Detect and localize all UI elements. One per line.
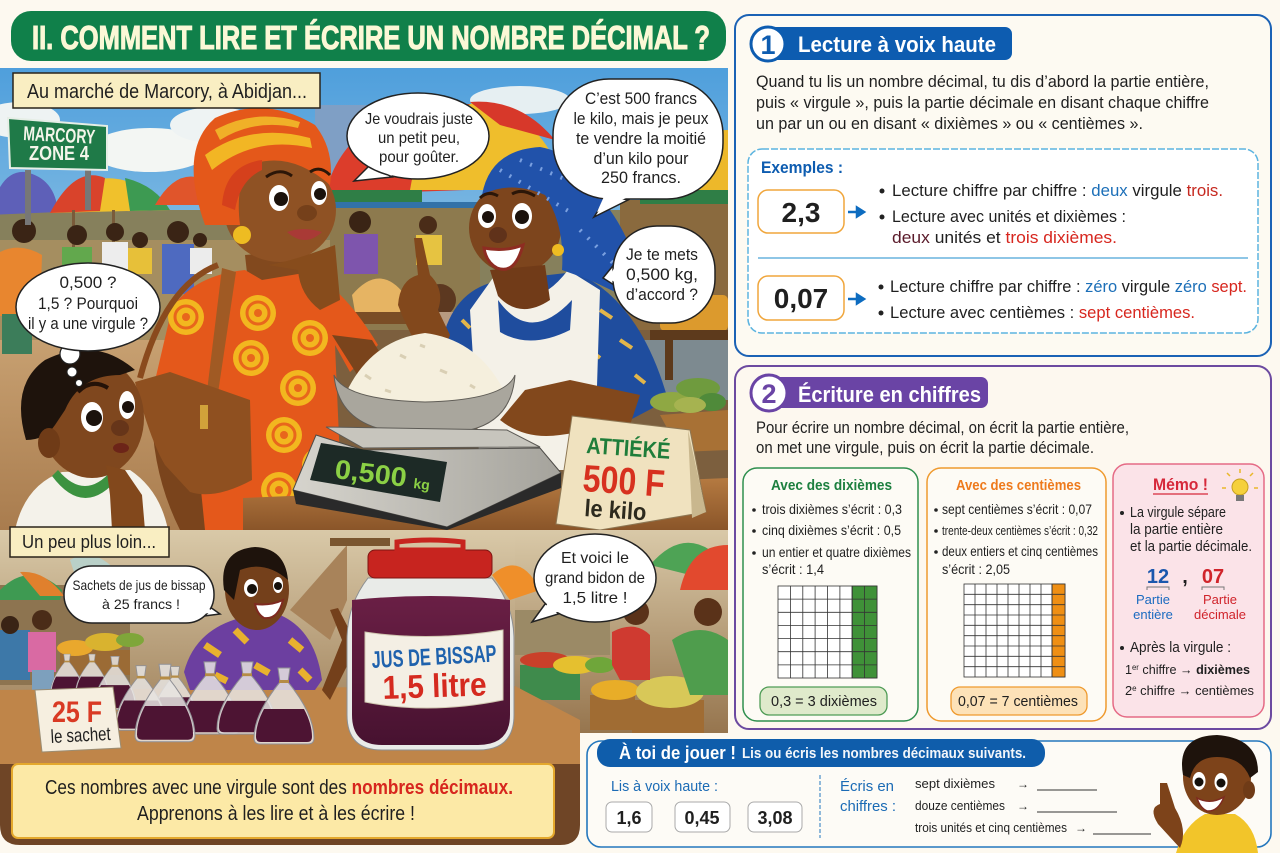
reading exercises: Lis à voix haute : xyxy=(611,778,718,795)
result: 0,3 xyxy=(760,687,887,715)
boy character xyxy=(15,350,168,530)
reading exercises xyxy=(606,778,802,832)
price sign: attiéké xyxy=(556,416,706,530)
price sign: 25 F xyxy=(35,687,121,752)
example 0,07 xyxy=(758,276,1247,322)
writing exercises: sept dixièmes xyxy=(915,776,995,791)
decimal parts example: 07 xyxy=(1202,566,1224,588)
speech bubble: 500 francs: 250 francs. xyxy=(601,169,681,187)
caption: un peu plus loin xyxy=(10,527,169,557)
attiéké bowl xyxy=(334,333,515,430)
banner: Lis ou écris les nombres décimaux suivants. xyxy=(742,745,1026,762)
price sign: 25 F: 25 F xyxy=(52,696,102,729)
card: mémo: e xyxy=(1132,684,1137,693)
card: avec des dixièmes: un entier et quatre dixièmes xyxy=(762,544,911,560)
price sign: attiéké: 500 F xyxy=(581,458,666,506)
title banner: II. COMMENT LIRE ET ÉCRIRE UN NOMBRE DÉCIMAL ? xyxy=(32,19,710,56)
market background stalls xyxy=(0,538,728,733)
banner: À toi de jouer ! xyxy=(619,742,736,763)
speech bubble: grand bidon: grand bidon de xyxy=(545,570,645,587)
introduction text: Pour écrire un nombre décimal, on écrit la partie entière, xyxy=(756,419,1129,437)
card: mémo: dixièmes xyxy=(1196,662,1250,677)
comic scene: bissap juice stall xyxy=(0,527,728,845)
decimal parts example xyxy=(1133,566,1246,622)
icon: light bulb xyxy=(1222,469,1258,501)
conclusion box: Ces nombres avec une virgule sont des nombres décimaux. xyxy=(45,777,513,799)
card: avec des centièmes: s’écrit : 2,05 xyxy=(942,561,1010,577)
introduction text: on met une virgule, puis on écrit la partie décimale. xyxy=(756,439,1094,457)
introduction text: Quand tu lis un nombre décimal, tu dis d’abord la partie entière, xyxy=(756,72,1209,91)
weighing scale: 0,500 xyxy=(333,454,408,493)
speech bubble: 500 francs: C’est 500 francs xyxy=(585,90,697,108)
speech bubble: sachets: à 25 francs ! xyxy=(102,596,180,612)
speech bubble: je voudrais juste: Je voudrais juste xyxy=(365,111,473,128)
card: avec des dixièmes xyxy=(743,468,918,721)
writing exercises: Écris en xyxy=(840,778,894,795)
card: mémo: Mémo ! xyxy=(1153,475,1208,494)
thought bubble: pourquoi une virgule xyxy=(16,263,160,386)
bissap jar: JUS DE BISSAP xyxy=(371,640,497,674)
introduction text: puis « virgule », puis la partie décimale en disant chaque chiffre xyxy=(756,93,1209,112)
writing exercises: chiffres : xyxy=(840,798,896,815)
juice bags xyxy=(50,654,314,744)
decimal parts example: , xyxy=(1182,566,1188,588)
speech bubble: 500 francs xyxy=(553,79,723,217)
clouds and buildings backdrop xyxy=(0,70,570,175)
thought bubble: pourquoi une virgule: il y a une virgule ? xyxy=(28,315,148,333)
example 2,3: Lecture avec unités et dixièmes : xyxy=(892,207,1126,226)
vendor man xyxy=(184,547,352,700)
thought bubble: pourquoi une virgule: 1,5 ? Pourquoi xyxy=(38,295,138,313)
card: mémo: 1 xyxy=(1125,662,1132,677)
heading xyxy=(751,375,988,411)
card: avec des centièmes: sept centièmes s’écrit : 0,07 xyxy=(942,501,1092,517)
card: mémo: er xyxy=(1132,663,1139,672)
title banner xyxy=(11,11,726,61)
crowd figures xyxy=(0,211,458,354)
result: 0,07 xyxy=(951,687,1087,715)
panel 1: lecture à voix haute xyxy=(735,15,1271,356)
heading xyxy=(751,27,1012,61)
writing exercises: trois unités et cinq centièmes xyxy=(915,820,1067,835)
price sign: attiéké: le kilo xyxy=(584,495,647,526)
heading: Lecture à voix haute xyxy=(798,32,996,57)
speech bubble: je voudrais juste: pour goûter. xyxy=(379,149,459,166)
street sign: MARCORY xyxy=(23,123,96,149)
example 2,3: 2,3 xyxy=(782,197,820,228)
caption: au marché xyxy=(13,73,320,108)
card: avec des centièmes xyxy=(927,468,1106,721)
speech bubble: je voudrais juste xyxy=(347,93,489,181)
card: avec des dixièmes: trois dixièmes s’écrit : 0,3 xyxy=(762,501,902,517)
bissap jar: 1,5 litre xyxy=(382,665,487,706)
panel 3: à toi de jouer xyxy=(587,735,1271,853)
examples box xyxy=(748,149,1258,333)
decimal parts example: décimale xyxy=(1194,607,1246,622)
introduction text: un par un ou en disant « dixièmes » ou « centièmes ». xyxy=(756,114,1143,133)
card: avec des dixièmes: cinq dixièmes s’écrit : 0,5 xyxy=(762,522,901,538)
writing exercises xyxy=(840,776,1151,835)
reading exercises: 3,08 xyxy=(757,808,793,828)
card: mémo xyxy=(1113,464,1264,717)
weighing scale xyxy=(293,427,561,530)
price sign: attiéké: ATTIÉKÉ xyxy=(586,431,671,464)
writing exercises: → xyxy=(1017,777,1029,791)
examples box: Exemples : xyxy=(761,159,843,177)
card: avec des centièmes: trente-deux centièmes s’écrit : 0,32 xyxy=(942,523,1098,538)
boy pointing finger xyxy=(1153,735,1258,853)
speech bubble: 500 francs: d’un kilo pour xyxy=(594,150,689,168)
speech bubble: 0,500 kg xyxy=(603,226,715,323)
street sign: ZONE 4 xyxy=(29,143,90,165)
writing exercises: → xyxy=(1075,821,1087,835)
street sign xyxy=(8,118,107,225)
card: mémo: chiffre → xyxy=(1139,662,1196,677)
speech bubble: 0,500 kg: d’accord ? xyxy=(626,286,698,304)
wooden counter xyxy=(0,686,580,764)
decimal parts example: Partie xyxy=(1136,592,1170,607)
card: avec des dixièmes: s’écrit : 1,4 xyxy=(762,561,824,577)
example 0,07: Lecture avec centièmes : sept centièmes. xyxy=(890,303,1195,322)
speech bubble: 500 francs: le kilo, mais je peux xyxy=(574,110,709,128)
thought bubble: pourquoi une virgule: 0,500 ? xyxy=(60,274,116,292)
example 2,3: deux unités et trois dixièmes. xyxy=(892,228,1117,247)
speech bubble: 500 francs: te vendre la moitié xyxy=(576,130,706,148)
writing exercises: → xyxy=(1017,799,1029,813)
banner xyxy=(597,739,1045,767)
panel 2: écriture en chiffres xyxy=(735,366,1271,729)
decimal parts example: 12 xyxy=(1147,566,1169,588)
weighing scale: kg xyxy=(413,475,431,493)
speech bubble: grand bidon: 1,5 litre ! xyxy=(562,590,628,607)
speech bubble: 0,500 kg: Je te mets xyxy=(626,246,698,264)
result: 0,07: 0,07 = 7 centièmes xyxy=(958,694,1078,710)
woman character xyxy=(150,108,400,530)
speech bubble: 0,500 kg: 0,500 kg, xyxy=(626,266,698,284)
speech bubble: grand bidon: Et voici le xyxy=(561,550,629,567)
card: mémo: et la partie décimale. xyxy=(1130,539,1252,555)
conclusion box xyxy=(12,764,554,838)
result: 0,3: 0,3 = 3 dixièmes xyxy=(771,694,877,710)
wooden counter xyxy=(243,478,728,530)
decimal parts example: Partie xyxy=(1203,592,1237,607)
example 2,3: Lecture chiffre par chiffre : deux virgule trois. xyxy=(892,181,1223,200)
caption: un peu plus loin: Un peu plus loin... xyxy=(22,532,156,552)
crowd band behind the characters xyxy=(0,200,728,530)
card: mémo: La virgule sépare xyxy=(1130,505,1226,521)
grid: dixièmes xyxy=(778,586,877,678)
caption: au marché: Au marché de Marcory, à Abidjan... xyxy=(27,81,307,103)
speech bubble: je voudrais juste: un petit peu, xyxy=(378,130,460,147)
vegetables basket xyxy=(650,378,728,452)
comic scene: market of Marcory xyxy=(0,68,728,530)
writing exercises: douze centièmes xyxy=(915,798,1005,813)
speech bubble: sachets: Sachets de jus de bissap xyxy=(72,577,206,593)
introduction text xyxy=(756,419,1129,457)
card: mémo: chiffre → centièmes xyxy=(1137,683,1254,698)
grid: centièmes xyxy=(964,584,1065,677)
heading: 1 xyxy=(760,30,776,60)
speech bubble: grand bidon xyxy=(532,534,656,622)
example 0,07: Lecture chiffre par chiffre : zéro virgule zéro sept. xyxy=(890,277,1247,296)
speech bubble: sachets xyxy=(64,566,220,623)
bissap jar xyxy=(347,540,514,750)
card: mémo: 2 xyxy=(1125,683,1132,698)
decimal parts example: entière xyxy=(1133,607,1173,622)
card: mémo: Après la virgule : xyxy=(1130,640,1231,656)
reading exercises: 1,6 xyxy=(616,808,642,828)
introduction text xyxy=(756,72,1209,133)
heading: 2 xyxy=(761,379,777,409)
price sign: 25 F: le sachet xyxy=(50,724,112,748)
conclusion box: Apprenons à les lire et à les écrire ! xyxy=(137,803,415,825)
vendor character xyxy=(398,147,668,470)
example 0,07: 0,07 xyxy=(774,283,828,314)
example 2,3 xyxy=(758,181,1223,247)
card: avec des centièmes: Avec des centièmes xyxy=(956,477,1081,494)
card: avec des centièmes: deux entiers et cinq centièmes xyxy=(942,543,1098,559)
card: avec des dixièmes: Avec des dixièmes xyxy=(771,477,892,494)
shoulder bag xyxy=(135,265,252,494)
market umbrellas xyxy=(0,102,728,250)
card: mémo: la partie entière xyxy=(1130,522,1223,538)
heading: Écriture en chiffres xyxy=(798,382,981,407)
reading exercises: 0,45 xyxy=(684,808,720,828)
